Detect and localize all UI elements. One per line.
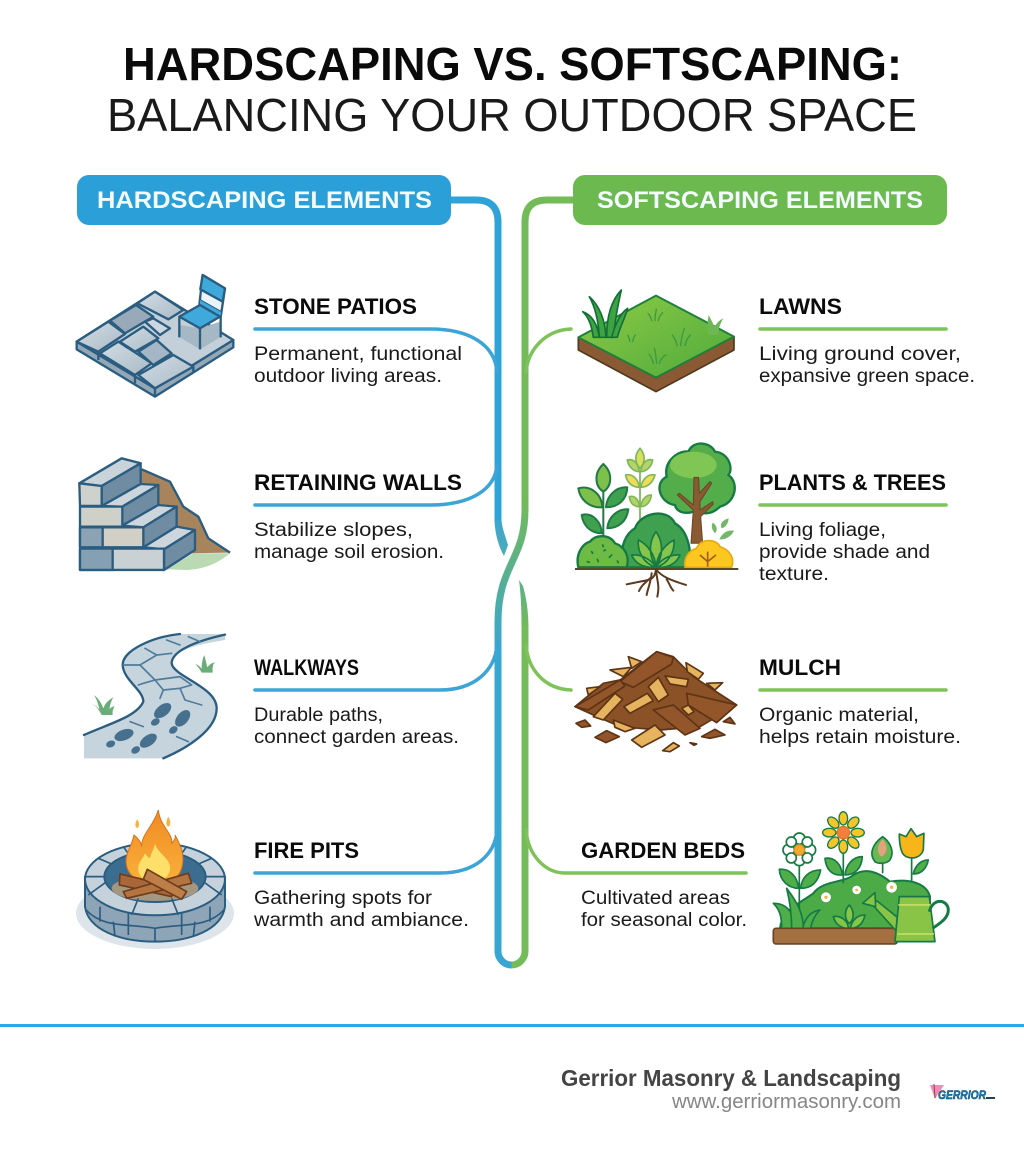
- softscaping header: SOFTSCAPING ELEMENTS: [597, 187, 923, 214]
- panel: hardscaping: [76, 175, 497, 949]
- description: stone patios: outdoor living areas.: [254, 366, 442, 387]
- description: plants and trees: provide shade and: [759, 542, 930, 563]
- description: mulch: Organic material,: [759, 705, 919, 726]
- description: retaining walls: manage soil erosion.: [254, 542, 444, 563]
- icon: lawn: [578, 290, 734, 392]
- title: BALANCING YOUR OUTDOOR SPACE: [107, 89, 917, 141]
- icon: retaining wall: [79, 458, 230, 570]
- item: stone patios: [77, 275, 462, 397]
- hardscaping header: HARDSCAPING ELEMENTS: [97, 187, 432, 214]
- description: fire pits: [253, 888, 469, 931]
- item: retaining walls: [79, 458, 462, 570]
- item: plants and trees: [575, 444, 946, 597]
- description: retaining walls: [254, 520, 444, 563]
- heading: lawns: LAWNS: [759, 294, 842, 319]
- icon: garden bed with watering can: [773, 812, 948, 944]
- icon: fire pit: [76, 810, 234, 949]
- connector lines: hardscaping: [255, 329, 497, 873]
- icon: stone patio with chair: [77, 275, 233, 397]
- softscaping header: [573, 175, 947, 225]
- description: fire pits: warmth and ambiance.: [253, 910, 469, 931]
- description: walkways: [254, 705, 459, 748]
- description: retaining walls: Stabilize slopes,: [254, 520, 413, 541]
- item: mulch: [575, 652, 961, 752]
- icon: mulch pile: [575, 652, 737, 752]
- description: mulch: [759, 705, 961, 748]
- heading: plants and trees: PLANTS & TREES: [759, 470, 946, 495]
- hardscaping header: [77, 175, 451, 225]
- description: lawns: expansive green space.: [759, 366, 975, 387]
- icon: plants and trees: [575, 444, 738, 597]
- description: plants and trees: [759, 520, 930, 585]
- description: garden beds: Cultivated areas: [581, 888, 730, 909]
- title: [107, 38, 917, 141]
- description: walkways: connect garden areas.: [254, 727, 459, 748]
- company name: Gerrior Masonry & Landscaping: [561, 1065, 901, 1091]
- heading: fire pits: FIRE PITS: [254, 838, 359, 863]
- heading: stone patios: STONE PATIOS: [254, 294, 417, 319]
- logo: [930, 1084, 995, 1102]
- description: plants and trees: Living foliage,: [759, 520, 886, 541]
- description: walkways: Durable paths,: [254, 705, 383, 726]
- item: lawns: [578, 290, 975, 392]
- description: fire pits: Gathering spots for: [254, 888, 433, 909]
- title: HARDSCAPING VS. SOFTSCAPING:: [123, 38, 902, 90]
- item: fire pits: [76, 810, 469, 949]
- footer: [0, 1024, 1024, 1113]
- description: mulch: helps retain moisture.: [759, 727, 961, 748]
- heading: retaining walls: RETAINING WALLS: [254, 470, 462, 495]
- description: garden beds: for seasonal color.: [581, 910, 747, 931]
- icon: winding walkway: [84, 634, 225, 758]
- heading: walkways: WALKWAYS: [254, 655, 359, 680]
- heading: garden beds: GARDEN BEDS: [581, 838, 745, 863]
- description: lawns: [759, 344, 975, 387]
- central intertwined connector: [445, 200, 578, 965]
- description: stone patios: Permanent, functional: [254, 344, 462, 365]
- heading: mulch: MULCH: [759, 655, 841, 680]
- description: lawns: Living ground cover,: [759, 344, 961, 365]
- connector lines: softscaping: [526, 329, 946, 873]
- item: walkways: [84, 634, 459, 758]
- panel: softscaping: [526, 175, 975, 944]
- website: www.gerriormasonry.com: [671, 1091, 901, 1113]
- description: garden beds: [581, 888, 747, 931]
- description: plants and trees: texture.: [759, 564, 829, 585]
- item: garden beds: [581, 812, 948, 944]
- description: stone patios: [254, 344, 462, 387]
- logo: GERRIOR: [938, 1088, 986, 1102]
